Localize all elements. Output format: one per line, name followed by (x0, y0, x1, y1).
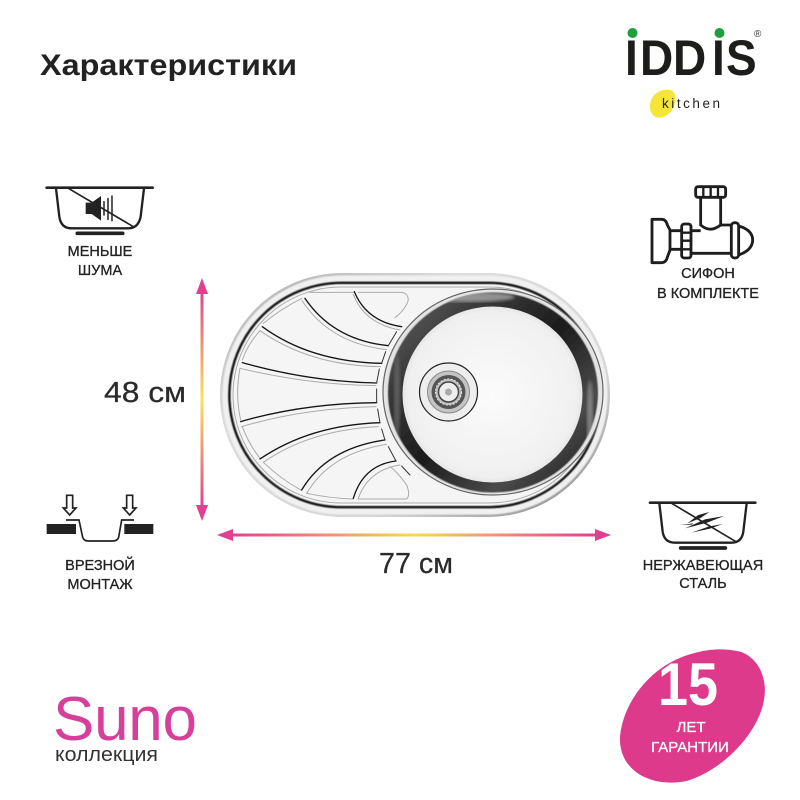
sink photo (220, 273, 610, 517)
drain recess (420, 363, 478, 421)
groove shadows (238, 292, 409, 499)
sink rim dark contour (230, 283, 600, 507)
arrow: height dimension (196, 278, 208, 521)
label: less noise: ШУМА (78, 263, 122, 279)
icon: flush mount (47, 495, 153, 541)
label: flush mount: ВРЕЗНОЙ (65, 556, 135, 574)
countertop blocks (47, 524, 76, 534)
drain (428, 371, 470, 413)
dimension: width: 77 см (379, 548, 453, 580)
bowl outer highlight (383, 289, 603, 495)
sink profile (66, 520, 134, 541)
badge blob (620, 649, 765, 783)
collection caption: коллекция (55, 744, 158, 766)
label: stainless steel: СТАЛЬ (679, 576, 727, 592)
logo: IDDIS kitchen (625, 28, 762, 118)
dimension: height: 48 см (104, 377, 186, 409)
icon: less noise (47, 188, 153, 233)
logo green dots (628, 28, 724, 38)
sink outer rim (220, 273, 610, 517)
kitchen wordmark: kitchen (662, 96, 720, 111)
registered mark: ® (754, 29, 762, 40)
warranty text: ГАРАНТИИ (651, 739, 729, 756)
bowl floor (402, 306, 582, 482)
groove short ends (377, 332, 410, 475)
arrow: width dimension (217, 529, 611, 541)
title: Характеристики (40, 49, 297, 82)
logo wordmark: IDDIS (625, 31, 757, 86)
label: siphon included: В КОМПЛЕКТЕ (657, 286, 759, 302)
label: siphon included: СИФОН (681, 266, 735, 282)
warranty number: 15 (658, 651, 718, 718)
icon: siphon included (652, 187, 753, 263)
drainboard grooves (238, 292, 410, 499)
label: flush mount: МОНТАЖ (67, 577, 133, 593)
label: less noise: МЕНЬШЕ (68, 244, 133, 260)
bowl (383, 289, 603, 495)
warranty text: ЛЕТ (676, 719, 706, 736)
warranty badge (620, 649, 765, 783)
yellow blob (650, 90, 676, 118)
label: stainless steel: НЕРЖАВЕЮЩАЯ (643, 558, 763, 574)
collection name: Suno (53, 685, 197, 754)
icon: stainless steel (650, 503, 755, 548)
down arrows (63, 495, 76, 515)
groove lines (241, 292, 402, 498)
bowl dark wall (388, 292, 598, 492)
